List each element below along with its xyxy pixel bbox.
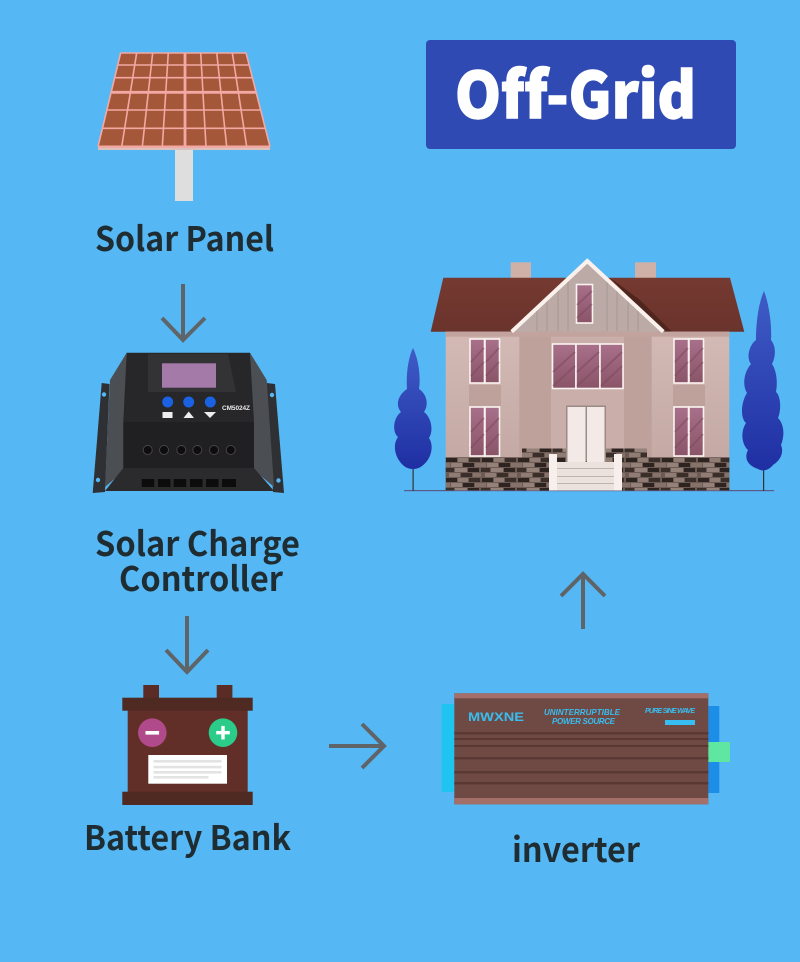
arrow: panel to controller [162, 284, 205, 340]
battery top bar [122, 698, 253, 711]
windows [470, 284, 704, 456]
arrow: inverter to house [561, 574, 605, 629]
label: Solar Charge Controller [95, 517, 300, 601]
tree left [394, 348, 432, 491]
screen [162, 363, 216, 388]
buttons [162, 396, 216, 408]
fins [454, 732, 708, 784]
mounting holes [96, 392, 281, 483]
product text [544, 708, 695, 726]
brand: MWXNE [468, 710, 524, 724]
minus terminal [138, 718, 167, 747]
tree right [742, 291, 783, 491]
product text: POWER SOURCE [552, 717, 616, 726]
button icons [162, 412, 216, 418]
model label: CM5024Z [222, 405, 250, 412]
battery bottom bar [122, 792, 253, 805]
title box [426, 40, 736, 149]
inverter body [454, 693, 708, 804]
steps [549, 454, 622, 490]
panel frame [98, 147, 270, 150]
lower face [123, 422, 254, 468]
product text: PURE SINE WAVE [645, 708, 695, 715]
bottom edge [454, 798, 708, 804]
panel pole [175, 150, 193, 201]
icon: house [394, 259, 783, 491]
label: Battery Bank: Battery Bank [84, 811, 291, 860]
upper body [123, 353, 254, 422]
mounting ears [93, 383, 110, 493]
icon: inverter [442, 693, 730, 804]
arrow: controller to battery [166, 616, 208, 672]
roof band [446, 332, 729, 337]
icon: solar charge controller [93, 353, 284, 493]
vents [142, 479, 236, 487]
label: inverter: inverter [512, 823, 640, 872]
right bracket [708, 706, 719, 793]
sockets [143, 446, 235, 454]
bottom slope [105, 468, 274, 491]
label: Solar Charge Controller: Solar Charge [95, 517, 300, 566]
label: Solar Charge Controller: Controller [119, 552, 283, 601]
title text: Off-Grid [455, 46, 696, 137]
terminals [143, 685, 159, 698]
bricks [446, 448, 729, 490]
terminal [708, 742, 730, 762]
icon: solar panel [98, 53, 270, 201]
roof shadow [610, 278, 672, 332]
plus terminal [209, 718, 237, 747]
window reflections [471, 291, 703, 448]
door [566, 406, 606, 462]
chimneys [511, 262, 531, 278]
ground line [404, 490, 774, 491]
arrow: battery to inverter [329, 724, 384, 768]
product text: UNINTERRUPTIBLE [544, 708, 621, 717]
gable [512, 259, 663, 332]
walls [446, 332, 729, 458]
label: Solar Panel: Solar Panel [95, 212, 274, 261]
spec box [665, 720, 695, 725]
battery label [148, 755, 227, 784]
battery body [128, 710, 248, 792]
roof [431, 278, 744, 332]
central block [519, 332, 652, 458]
heading: Off-Grid [426, 40, 736, 149]
side panels [469, 385, 501, 406]
side wings [105, 353, 127, 487]
left bracket [442, 704, 454, 792]
top edge [454, 693, 708, 698]
icon: battery [122, 685, 253, 805]
panel cells [98, 53, 270, 147]
